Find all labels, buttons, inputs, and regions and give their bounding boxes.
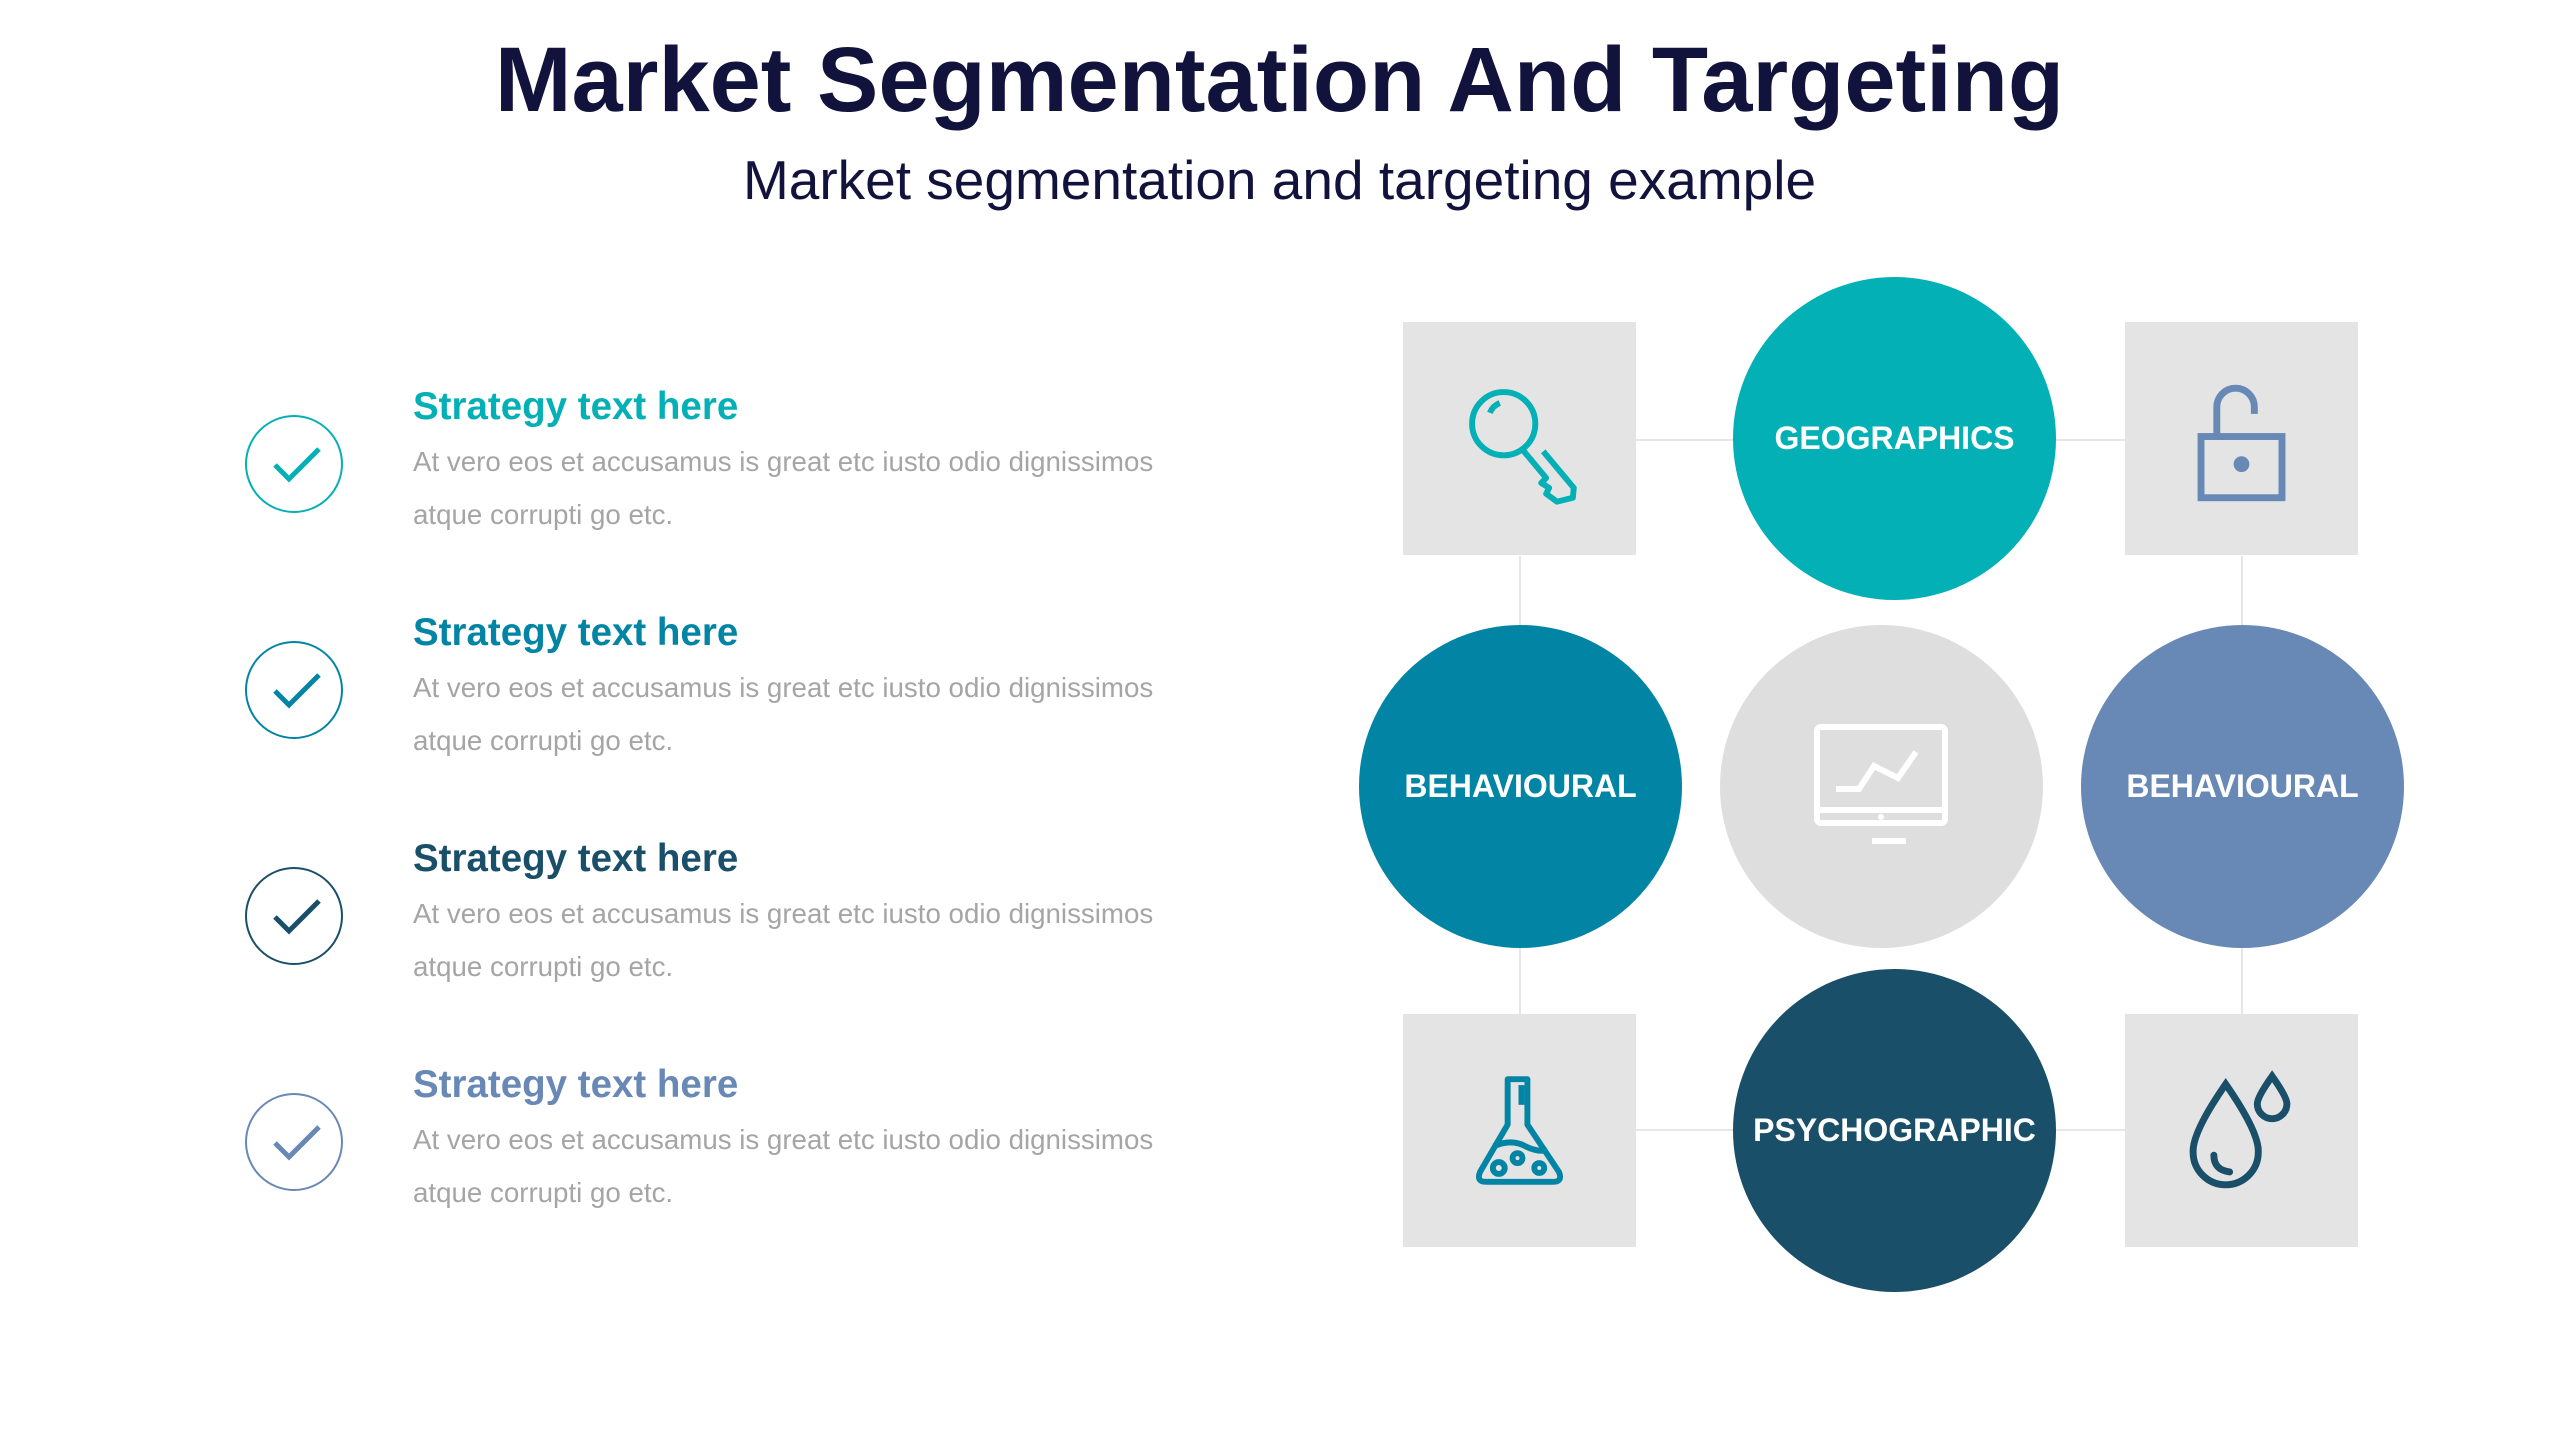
heading 3: Strategy text here <box>413 837 738 880</box>
body 1 <box>413 446 1153 530</box>
body 4: atque corrupti go etc. <box>413 1177 673 1208</box>
circle: PSYCHOGRAPHIC: PSYCHOGRAPHIC <box>1753 1112 2036 1148</box>
body 4 <box>413 1124 1153 1208</box>
heading 2: Strategy text here <box>413 611 738 654</box>
circle: BEHAVIOURAL right <box>2081 625 2404 948</box>
icon: check 2 <box>245 641 343 739</box>
square: key icon <box>1403 322 1636 555</box>
circle: GEOGRAPHICS <box>1733 277 2056 600</box>
icon: check 1 <box>245 415 343 513</box>
icon: check 3 <box>245 867 343 965</box>
heading 4: Strategy text here <box>413 1063 738 1106</box>
item 1 <box>245 385 1153 530</box>
title: Market Segmentation And Targeting <box>495 29 2064 131</box>
subtitle: Market segmentation and targeting example <box>743 149 1816 211</box>
body 2: atque corrupti go etc. <box>413 725 673 756</box>
circle: BEHAVIOURAL left: BEHAVIOURAL <box>1404 768 1637 804</box>
item 3 <box>245 837 1153 982</box>
icon: check 4 <box>245 1093 343 1191</box>
square: lock icon <box>2125 322 2358 555</box>
heading 1: Strategy text here <box>413 385 738 428</box>
circle: GEOGRAPHICS: GEOGRAPHICS <box>1774 420 2015 456</box>
diagram: segmentation grid <box>1359 277 2404 1292</box>
body 2: At vero eos et accusamus is great etc iusto odio dignissimos <box>413 672 1153 703</box>
body 3: At vero eos et accusamus is great etc iusto odio dignissimos <box>413 898 1153 929</box>
body 3: atque corrupti go etc. <box>413 951 673 982</box>
body 2 <box>413 672 1153 756</box>
circle: BEHAVIOURAL right: BEHAVIOURAL <box>2126 768 2359 804</box>
body 1: At vero eos et accusamus is great etc iusto odio dignissimos <box>413 446 1153 477</box>
body 1: atque corrupti go etc. <box>413 499 673 530</box>
item 4 <box>245 1063 1153 1208</box>
square: drops icon <box>2125 1014 2358 1247</box>
item 2 <box>245 611 1153 756</box>
body 3 <box>413 898 1153 982</box>
body 4: At vero eos et accusamus is great etc iusto odio dignissimos <box>413 1124 1153 1155</box>
circle: BEHAVIOURAL left <box>1359 625 1682 948</box>
circle: monitor center <box>1720 625 2043 948</box>
square: flask icon <box>1403 1014 1636 1247</box>
circle: PSYCHOGRAPHIC <box>1733 969 2056 1292</box>
